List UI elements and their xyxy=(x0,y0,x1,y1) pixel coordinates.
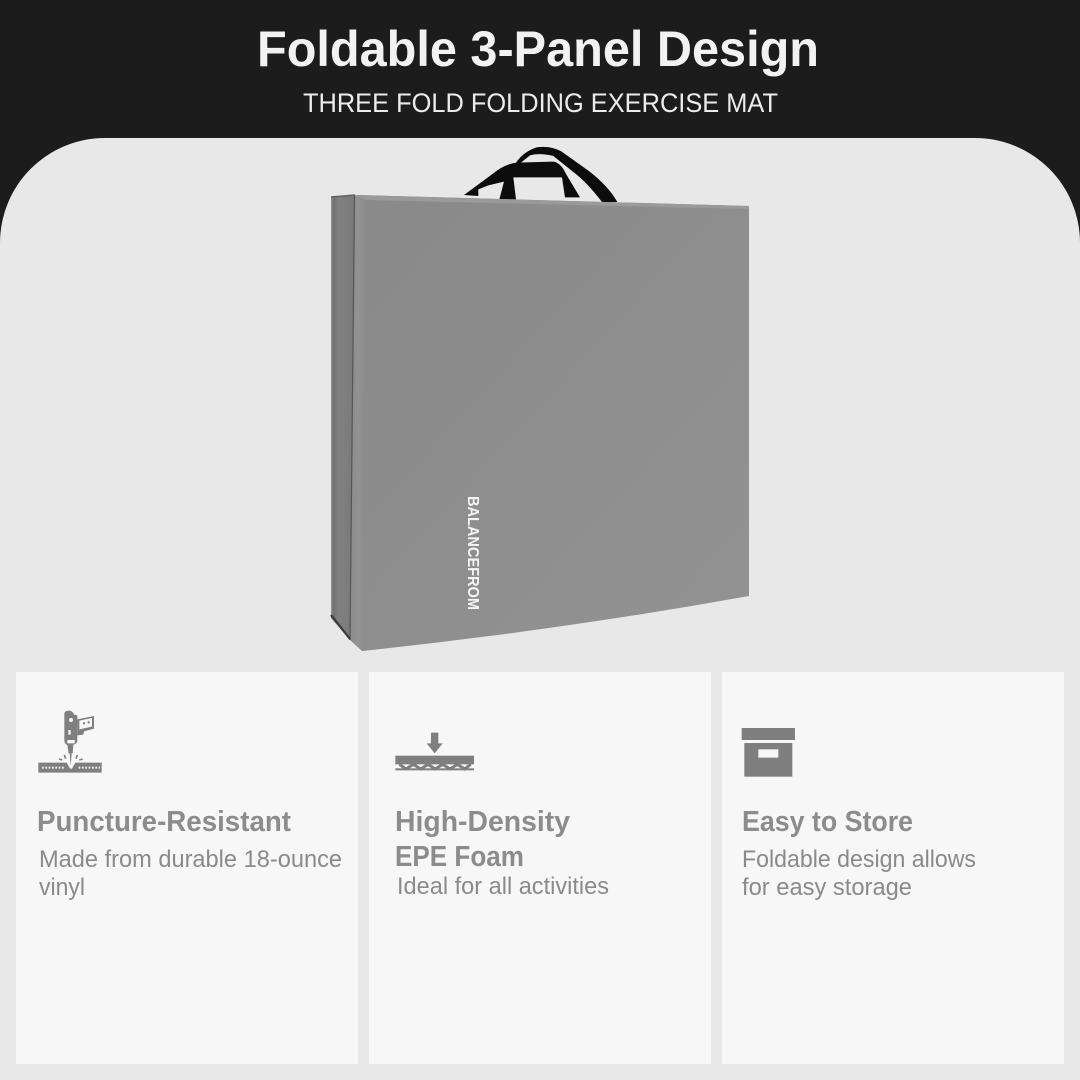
mat carry handles xyxy=(464,147,617,202)
icon: nail gun puncturing a surface xyxy=(38,711,102,773)
heading xyxy=(395,806,570,873)
mat folded spine xyxy=(331,195,355,640)
heading: EPE Foam xyxy=(395,841,524,873)
description: Ideal for all activities xyxy=(397,873,609,900)
heading: High-Density xyxy=(395,806,570,838)
mat top edge xyxy=(355,195,749,209)
description: Foldable design allows xyxy=(742,846,976,873)
product: folded exercise mat xyxy=(331,147,749,651)
heading: Puncture-Resistant xyxy=(37,806,291,838)
title: Foldable 3-Panel Design xyxy=(257,21,819,77)
panel: puncture-resistant xyxy=(16,672,358,1064)
panel: easy to store xyxy=(722,672,1064,1064)
description xyxy=(742,846,976,901)
icon: storage box xyxy=(742,728,795,777)
subtitle: THREE FOLD FOLDING EXERCISE MAT xyxy=(303,88,778,118)
description: for easy storage xyxy=(742,874,912,901)
description xyxy=(39,846,342,901)
header background xyxy=(0,0,1080,300)
description: vinyl xyxy=(39,874,85,901)
mat body xyxy=(331,195,749,651)
brand label: BALANCEFROM xyxy=(464,496,481,610)
description: Made from durable 18-ounce xyxy=(39,846,342,873)
mat front left edge xyxy=(350,195,366,651)
heading: Easy to Store xyxy=(742,806,913,838)
panel: high-density foam xyxy=(369,672,711,1064)
icon: pressure on foam layer xyxy=(395,733,474,770)
